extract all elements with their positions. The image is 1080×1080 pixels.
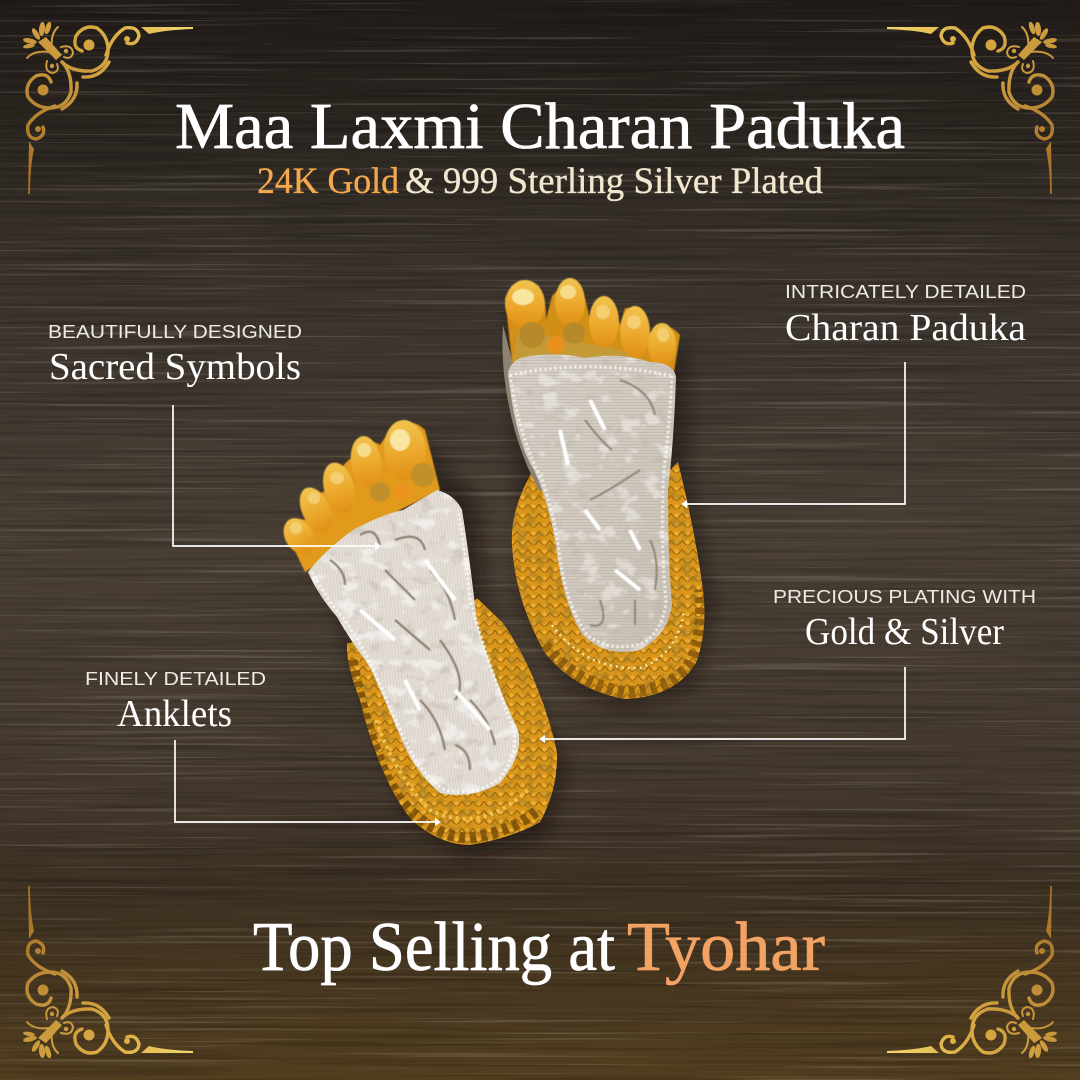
callout: anklets: FINELY DETAILED xyxy=(85,669,266,689)
callout: sacred symbols: BEAUTIFULLY DESIGNED xyxy=(48,322,302,342)
right silver sole xyxy=(508,354,676,652)
left foot shadow xyxy=(306,438,566,858)
callout: charan paduka xyxy=(681,282,1026,508)
paduka: left foot xyxy=(277,418,566,858)
right anklet xyxy=(512,462,704,699)
title: Maa Laxmi Charan Paduka xyxy=(175,90,905,163)
left relief xyxy=(312,510,515,792)
ornament: bottom-left corner xyxy=(23,886,193,1059)
left anklet xyxy=(340,595,565,850)
subtitle: 24K Gold xyxy=(257,161,399,202)
callout: anklets: Anklets xyxy=(117,693,232,735)
ornament: top-left corner xyxy=(23,21,193,194)
callout: gold and silver: Gold & Silver xyxy=(805,611,1004,653)
left toes xyxy=(277,418,440,572)
footer heading: Tyohar xyxy=(627,909,825,986)
ornament: top-right corner xyxy=(887,21,1057,194)
callout: sacred symbols: Sacred Symbols xyxy=(49,346,301,388)
right foot shadow xyxy=(511,306,714,711)
paduka: right foot xyxy=(500,278,714,711)
ornament: bottom-right corner xyxy=(887,886,1057,1059)
footer heading: Top Selling at xyxy=(253,909,616,986)
callout: sacred symbols xyxy=(48,322,381,550)
callout: gold and silver xyxy=(539,587,1036,743)
left silver sole xyxy=(308,490,520,795)
callout: anklets xyxy=(85,669,441,826)
callout: charan paduka: INTRICATELY DETAILED xyxy=(785,282,1026,302)
callout: gold and silver: PRECIOUS PLATING WITH xyxy=(773,587,1036,607)
subtitle: & 999 Sterling Silver Plated xyxy=(405,161,823,202)
right toes xyxy=(505,278,680,372)
callout: charan paduka: Charan Paduka xyxy=(785,307,1026,349)
right side wall xyxy=(502,325,545,492)
right relief xyxy=(510,367,672,647)
